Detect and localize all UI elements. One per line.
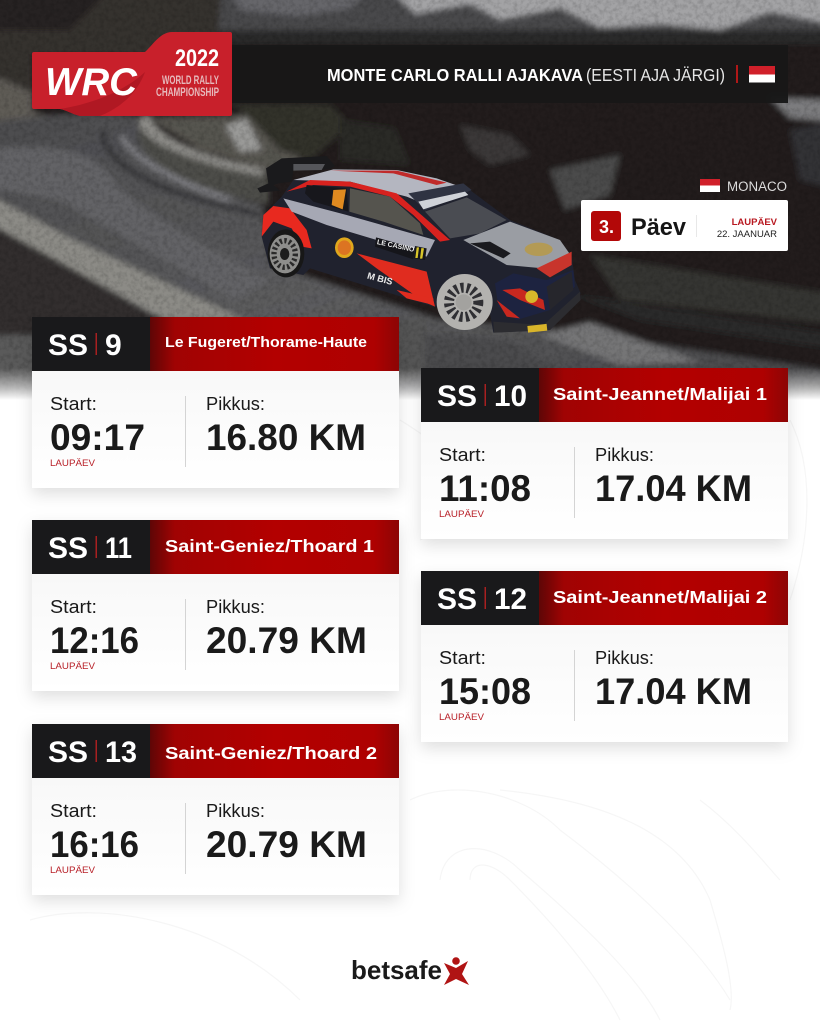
red roof stripe <box>287 180 450 242</box>
stage card: SS 11: 20.79 KM <box>206 620 367 661</box>
stage card: SS 12 <box>421 571 788 742</box>
stage card: SS 11: Pikkus: <box>206 597 265 617</box>
stage card: SS 13: 20.79 KM <box>206 824 367 865</box>
day badge: LAUPÄEV <box>732 217 778 228</box>
stage card: SS 10: 11:08 <box>439 468 531 509</box>
stage card: SS 11: SS <box>48 532 88 565</box>
WRC 2022 logo: WORLD RALLY <box>162 75 219 87</box>
location label: Monaco: MONACO <box>727 179 787 194</box>
roof <box>294 169 456 200</box>
le casino sticker <box>375 237 415 259</box>
hillside above the wall <box>150 110 300 170</box>
day badge: Päev <box>631 214 687 241</box>
body <box>262 169 581 333</box>
low stone wall and cliff <box>0 228 158 337</box>
hero photo: rally car on mountain road <box>0 0 820 420</box>
rally car <box>257 156 581 333</box>
location label: Monaco <box>700 179 787 194</box>
stage card: SS 13: LAUPÄEV <box>50 865 96 876</box>
stage card: SS 9: Pikkus: <box>206 394 265 414</box>
stage card: SS 13: SS <box>48 736 88 769</box>
side red graphics <box>357 253 435 307</box>
rally car: LE CASINO <box>376 239 415 254</box>
stage card: SS 13: 16:16 <box>50 824 139 865</box>
stage card: SS 9: LAUPÄEV <box>50 458 96 469</box>
stage card: SS 9: SS <box>48 329 88 362</box>
day badge: 3. <box>599 217 614 237</box>
stage card: SS 10: LAUPÄEV <box>439 509 485 520</box>
WRC 2022 logo: CHAMPIONSHIP <box>156 87 219 99</box>
side panel silver <box>283 198 435 257</box>
side windows <box>305 185 348 212</box>
stage card: SS 10: Saint-Jeannet/Malijai 1 <box>553 384 767 404</box>
stage card: SS 12: Start: <box>439 648 486 668</box>
bonnet <box>463 222 572 268</box>
stage card: SS 10 <box>421 368 788 539</box>
day badge: 22. JAANUAR <box>717 229 777 240</box>
texture overlay <box>0 0 820 400</box>
stage card: SS 11 <box>32 520 399 691</box>
stage card: SS 10: SS <box>437 380 477 413</box>
rear wing <box>258 156 318 193</box>
rear wheel <box>268 229 304 277</box>
snow patches on the hillside <box>460 125 530 165</box>
shell badge <box>335 237 354 258</box>
stage card: SS 12: SS <box>437 583 477 616</box>
rally car: M BIS <box>366 271 394 287</box>
stage card: SS 9: 9 <box>105 329 122 362</box>
icon: Monaco flag <box>749 66 775 82</box>
mountain with snow <box>215 0 820 30</box>
stage card: SS 12: 15:08 <box>439 671 531 712</box>
stage card: SS 13 <box>32 724 399 895</box>
front bumper <box>495 270 575 320</box>
stone retaining wall <box>144 134 272 206</box>
header title: MONTE CARLO RALLI AJAKAVA <box>327 65 583 85</box>
stage card: SS 11: 12:16 <box>50 620 139 661</box>
betsafe logo: betsafe <box>351 955 442 985</box>
WRC 2022 logo: WRC <box>45 61 138 104</box>
stage card: SS 12: LAUPÄEV <box>439 712 485 723</box>
stage card: SS 12: 12 <box>494 583 527 616</box>
stage card: SS 10: 10 <box>494 380 527 413</box>
stage card: SS 11: 11 <box>105 532 132 565</box>
stage card: SS 10: Pikkus: <box>595 445 654 465</box>
stage card: SS 13: Saint-Geniez/Thoard 2 <box>165 743 377 763</box>
stage card: SS 9: Start: <box>50 394 97 414</box>
stage card: SS 13: 13 <box>105 736 137 769</box>
rock top left <box>0 0 222 90</box>
stage card: SS 10: Start: <box>439 445 486 465</box>
stage card: SS 9 <box>32 317 399 488</box>
WRC 2022 logo <box>32 32 232 116</box>
stage card: SS 10: 17.04 KM <box>595 468 752 509</box>
stage card: SS 11: LAUPÄEV <box>50 661 96 672</box>
road surface <box>0 114 820 420</box>
topographic background pattern <box>30 420 807 1020</box>
stage card: SS 9: 16.80 KM <box>206 417 366 458</box>
stage card: SS 13: Start: <box>50 801 97 821</box>
stage card: SS 13: Pikkus: <box>206 801 265 821</box>
landscape: rocks, forest, road and walls <box>0 0 820 420</box>
windscreen <box>425 197 507 238</box>
stage card: SS 11: Saint-Geniez/Thoard 1 <box>165 536 374 556</box>
stage card: SS 9: Le Fugeret/Thorame-Haute <box>165 334 367 351</box>
WRC 2022 logo: 2022 <box>175 45 219 72</box>
day badge <box>581 200 788 251</box>
red rear arch <box>262 206 312 248</box>
stage card: SS 11: Start: <box>50 597 97 617</box>
stage card: SS 12: Pikkus: <box>595 648 654 668</box>
white fade at bottom of photo <box>0 368 820 400</box>
front wheel <box>437 274 493 330</box>
header bar <box>232 45 788 103</box>
stage card: SS 12: 17.04 KM <box>595 671 752 712</box>
stage card: SS 9: 09:17 <box>50 417 145 458</box>
icon: betsafe star figure <box>444 957 469 985</box>
header subtitle: (EESTI AJA JÄRGI) <box>586 65 725 85</box>
stage card: SS 12: Saint-Jeannet/Malijai 2 <box>553 587 767 607</box>
